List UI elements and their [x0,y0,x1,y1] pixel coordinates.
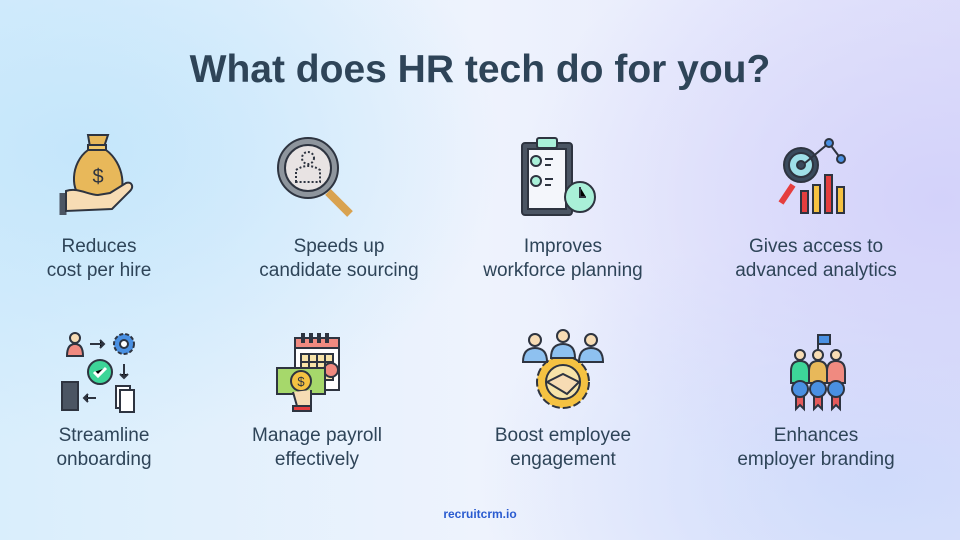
label: streamline onboarding: Streamline [59,425,149,446]
label: employer branding: Enhances [774,425,858,446]
label: speeds up sourcing [259,236,419,281]
label: employer branding: employer branding [737,449,895,470]
label: workforce planning: workforce planning [483,260,643,281]
title: What does HR tech do for you? [190,48,770,91]
label: reduces cost: Reduces [62,236,136,257]
footer: recruitcrm.io [443,507,517,521]
label: advanced analytics [735,236,897,281]
label: engagement [495,425,631,470]
icon: money bag in hand [60,134,134,215]
label: workforce planning: Improves [524,236,602,257]
icon: payroll: $ [297,374,305,389]
icon: money bag in hand: $ [92,166,104,188]
label: speeds up sourcing: Speeds up [294,236,384,257]
label: engagement: Boost employee [495,425,631,446]
icon: engagement gear handshake [522,329,604,409]
label: payroll: effectively [275,449,359,470]
label: advanced analytics: Gives access to [749,236,883,257]
icon: analytics [778,138,846,214]
label: employer branding [737,425,895,470]
label: payroll [252,425,382,470]
icon: employer branding [790,334,846,412]
label: engagement: engagement [510,449,616,470]
icon: onboarding flow [61,332,135,413]
label: speeds up sourcing: candidate sourcing [259,260,419,281]
label: streamline onboarding: onboarding [56,449,152,470]
label: payroll: Manage payroll [252,425,382,446]
icon: magnifier candidate [277,137,353,217]
label: reduces cost: cost per hire [47,260,151,281]
label: advanced analytics: advanced analytics [735,260,897,281]
icon: payroll [276,333,340,412]
label: streamline onboarding [56,425,152,470]
label: workforce planning [483,236,643,281]
label: reduces cost [47,236,151,281]
icon: clipboard with clock [521,137,596,216]
